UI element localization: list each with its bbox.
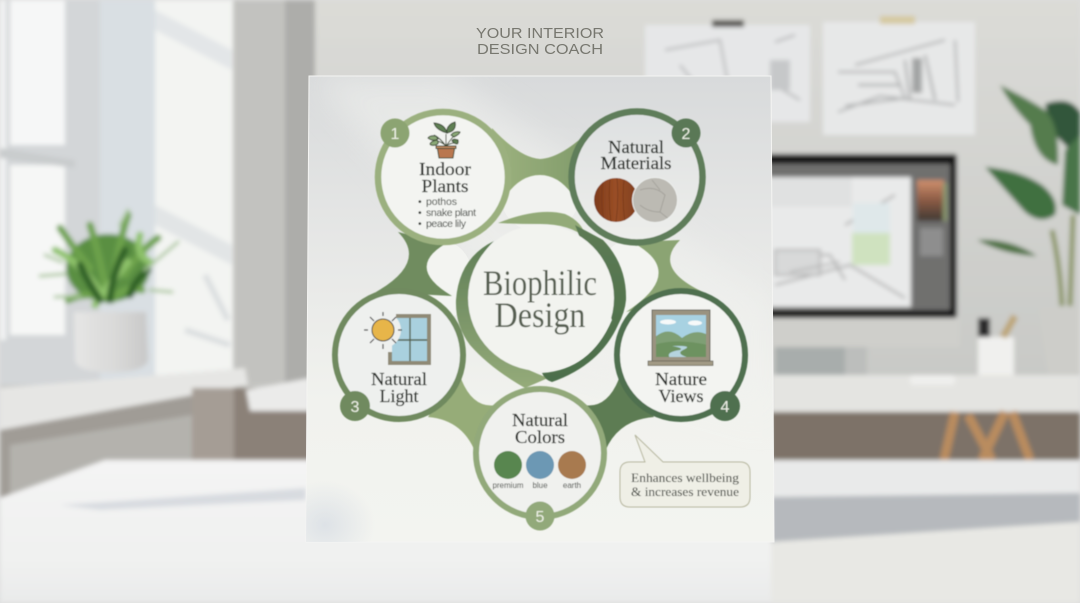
badge 4: 4 xyxy=(721,399,730,416)
badge 5 xyxy=(526,502,554,530)
connector webs xyxy=(376,128,703,457)
icon: window xyxy=(388,314,431,365)
back wall sketches xyxy=(645,16,975,135)
node 1: indoor plants xyxy=(378,112,508,242)
label: natural colors: Colors xyxy=(515,427,565,447)
right potted plant xyxy=(977,85,1080,373)
label: natural materials: Materials xyxy=(600,153,672,173)
central title: Design xyxy=(494,295,586,335)
label: natural colors xyxy=(512,410,568,447)
monitor xyxy=(760,154,960,375)
badge 1: 1 xyxy=(391,126,400,143)
central swirl xyxy=(456,212,626,388)
label: nature views: Views xyxy=(658,386,704,406)
label: indoor plants: Indoor xyxy=(419,159,471,179)
node 4: nature views xyxy=(617,291,745,421)
list: plant examples: • xyxy=(418,196,422,208)
list: plant examples: pothos xyxy=(426,196,457,208)
brand title: YOUR INTERIOR xyxy=(476,25,604,42)
badge 3: 3 xyxy=(351,399,360,416)
central title xyxy=(483,263,597,335)
foreground table xyxy=(0,460,1080,603)
label: natural colors: Natural xyxy=(512,410,568,430)
label: natural light: Natural xyxy=(371,369,427,389)
label: natural materials xyxy=(600,137,672,173)
pen cup xyxy=(978,316,1015,383)
label: nature views xyxy=(655,369,707,406)
node 2: natural materials xyxy=(572,112,702,242)
icon: sun xyxy=(364,312,402,349)
desk xyxy=(771,375,1080,462)
node 3: natural light xyxy=(335,291,463,421)
swatch: wood xyxy=(594,178,638,222)
swatch: earth: earth xyxy=(563,481,581,490)
callout: wellbeing and revenue: & increases revenue xyxy=(631,484,739,499)
central title: Biophilic xyxy=(483,263,597,303)
list: plant examples: snake plant xyxy=(426,207,476,219)
board panel xyxy=(306,76,774,542)
list: plant examples: • xyxy=(418,218,422,230)
list: plant examples: peace lily xyxy=(426,218,467,230)
callout: wellbeing and revenue xyxy=(620,435,750,507)
list: plant examples: • xyxy=(418,207,422,219)
left window xyxy=(0,0,100,385)
list: plant examples xyxy=(418,196,476,230)
window sill xyxy=(0,368,310,500)
swatch: stone xyxy=(632,177,678,223)
swatch: blue: blue xyxy=(532,481,548,490)
brand title: DESIGN COACH xyxy=(477,41,603,58)
callout: wellbeing and revenue: Enhances wellbeing xyxy=(631,470,740,485)
label: indoor plants xyxy=(419,159,471,196)
biophilic network diagram xyxy=(335,112,750,530)
label: indoor plants: Plants xyxy=(422,176,468,196)
node 5: natural colors xyxy=(476,389,604,530)
swatch: earth xyxy=(558,451,586,490)
badge 2: 2 xyxy=(682,126,691,143)
swatch: blue xyxy=(526,451,554,490)
label: nature views: Nature xyxy=(655,369,707,389)
swatch: premium green xyxy=(492,451,524,490)
badge 5: 5 xyxy=(536,509,545,526)
icon: potted plant xyxy=(428,122,460,158)
label: natural materials: Natural xyxy=(608,137,664,157)
label: natural light xyxy=(371,369,427,406)
brand title xyxy=(476,25,604,58)
label: natural light: Light xyxy=(380,386,418,406)
icon: landscape window xyxy=(648,310,713,366)
left wall xyxy=(100,0,315,385)
swatch: premium green: premium xyxy=(492,481,524,490)
left potted plant xyxy=(40,210,178,372)
central circle xyxy=(468,225,614,371)
